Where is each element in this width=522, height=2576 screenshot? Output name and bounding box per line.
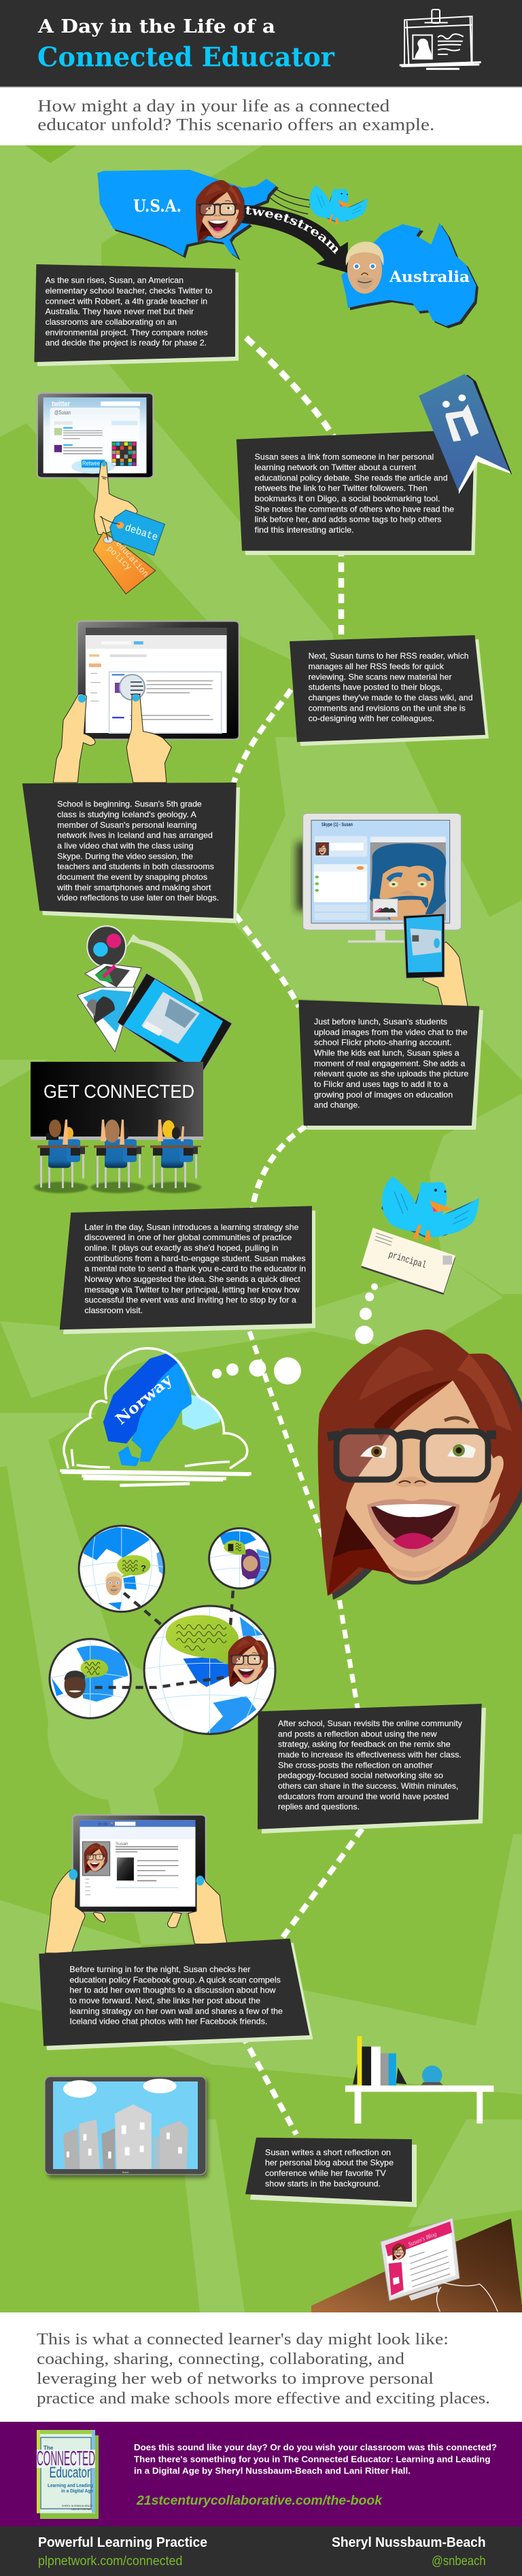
book cover xyxy=(37,2430,99,2519)
panel text xyxy=(84,1223,306,1315)
tablet: Facebook held in two hands xyxy=(46,1815,227,1953)
question mark: ? xyxy=(141,1563,146,1573)
panel text: class is studying Iceland's geology. A xyxy=(57,810,196,819)
intro text: How might a day in your life as a connected xyxy=(37,96,390,115)
publisher credit: plpnetwork.com/connected xyxy=(38,2554,182,2569)
panel text: educators from around the world have posted xyxy=(278,1792,449,1801)
panel text: replies and questions. xyxy=(278,1803,360,1812)
panel text xyxy=(69,1965,283,2026)
panel text: her personal blog about the Skype xyxy=(265,2159,394,2168)
portrait: Susan on globe xyxy=(228,1636,268,1687)
panel text: growing pool of images on education xyxy=(314,1090,453,1099)
book cover: in a Digital Age xyxy=(61,2488,93,2494)
globe: Robert xyxy=(79,1526,164,1612)
panel: after school xyxy=(258,1704,486,1833)
label: tweetstream xyxy=(245,214,339,260)
monitor frame xyxy=(381,2218,459,2301)
tablet body xyxy=(77,621,239,739)
closing statement: practice and make schools more effective and exciting places. xyxy=(37,2389,490,2408)
author credit: @snbeach xyxy=(432,2554,486,2569)
panel text xyxy=(56,800,219,903)
panel text: video reflections to use later on their blogs. xyxy=(57,894,219,903)
monitor stand xyxy=(375,929,385,942)
icon: Susan avatar xyxy=(392,2243,406,2261)
panel text: teachers and students in both classrooms xyxy=(57,863,214,872)
arrow: upload sweep xyxy=(125,934,203,1003)
panel: school is beginning xyxy=(22,783,240,923)
panel text: She notes the comments of others who have read the xyxy=(255,505,454,514)
panel text: connect with Robert, a 4th grade teacher in xyxy=(46,297,207,306)
globe: purple-haired colleague xyxy=(209,1528,271,1588)
panel: later in the day xyxy=(60,1206,315,1334)
icon: flickr dots xyxy=(87,926,126,967)
panel text: made to increase its effectiveness with her class. xyxy=(278,1751,462,1759)
portrait: Robert on globe xyxy=(105,1571,122,1596)
panel text: Next, Susan turns to her RSS reader, which xyxy=(309,652,469,661)
label: Norway: Norway xyxy=(112,1371,176,1429)
desk with blog monitor xyxy=(311,2218,522,2312)
panel: before turning in xyxy=(39,1939,313,2050)
hand: right xyxy=(126,694,171,783)
label: principal: principal xyxy=(387,1249,428,1271)
panel text: member of Susan's personal learning xyxy=(57,821,196,829)
sketch outline xyxy=(60,1348,251,1486)
panel text: link before her, and adds some tags to help others xyxy=(255,516,442,524)
blog screen xyxy=(385,2221,455,2297)
closing statement: coaching, sharing, connecting, collaborating, and xyxy=(37,2350,404,2368)
label: retweet button: Retwee xyxy=(82,460,100,467)
bookmark: Diigo ribbon xyxy=(419,374,512,495)
icon: sketched id badge xyxy=(400,10,481,69)
title line two: Connected Educator xyxy=(37,42,334,73)
tag: education policy xyxy=(93,532,156,594)
book cover: SHERYL NUSSBAUM-BEACH xyxy=(62,2505,92,2507)
panel text: online. It plays out exactly as she'd hoped, pulling in xyxy=(84,1244,278,1253)
bookshelf table with books and globe xyxy=(345,2036,493,2124)
panel text: retweets the link to her Twitter followers. Then xyxy=(255,484,428,493)
dashed path: the day's journey xyxy=(234,338,362,2134)
panel text: learning strategy on her own wall and shares a few of the xyxy=(69,2007,283,2016)
panel text: network lives in Iceland and has arranged xyxy=(57,831,213,840)
panel text: a mental note to send a thank you e-card to the educator in xyxy=(84,1265,306,1274)
closing statement: leveraging her web of networks to improve personal xyxy=(37,2369,434,2388)
book cover: The xyxy=(44,2445,54,2451)
panel text: find this interesting article. xyxy=(255,526,354,535)
land: Norway xyxy=(103,1353,178,1444)
panel text: a live video chat with the class using xyxy=(57,842,193,851)
panel text xyxy=(265,2148,394,2188)
promo text: Then there's something for you in The Connected Educator: Learning and Leading xyxy=(134,2454,491,2464)
panel text: Susan sees a link from someone in her personal xyxy=(255,453,434,462)
book cover: Learning and Leading xyxy=(48,2482,93,2488)
panel text: comments and revisions on the unit she is xyxy=(309,704,466,713)
purple book promotion xyxy=(0,2422,522,2526)
panel text: Before turning in for the night, Susan checks her xyxy=(69,1965,251,1974)
portrait: Susan profile photo xyxy=(84,1843,107,1874)
panel text: successful the event was and inviting her to stop by for a xyxy=(84,1296,296,1305)
panel text: Iceland video chat photos with her Facebook friends. xyxy=(69,2018,267,2026)
icon: skype caller avatar xyxy=(317,842,328,856)
tablet with twitter, tags and finger: policy xyxy=(105,543,134,573)
map: USA xyxy=(97,170,279,260)
panel text: As the sun rises, Susan, an American xyxy=(46,276,184,285)
panel text: After school, Susan revisits the online community xyxy=(278,1719,462,1728)
panel text: message via Twitter to her principal, letting her know how xyxy=(84,1285,300,1294)
hand: pointing finger xyxy=(94,461,137,535)
footer xyxy=(0,2526,522,2576)
panel text: and posts a reflection about using the new xyxy=(278,1730,437,1738)
title line one: A Day in the Life of a xyxy=(37,16,275,37)
panel text: educational policy debate. She reads the article and xyxy=(255,473,448,482)
cable xyxy=(436,2283,498,2312)
label: profile name: Susan xyxy=(116,1842,128,1846)
panel text: elementary school teacher, checks Twitter to xyxy=(46,287,213,296)
label: twitter logo: twitter xyxy=(52,400,71,408)
portrait: colleague with cap xyxy=(65,1670,86,1698)
table top xyxy=(345,2086,493,2092)
chalkboard with students xyxy=(31,1062,203,1193)
globe: Susan xyxy=(144,1605,275,1734)
tablet with twitter, tags and finger: education xyxy=(114,539,151,579)
maps: U.S.A. and Australia linked by tweetstream: tweetstream xyxy=(245,207,338,254)
panel text: strategy, asking for feedback on the remix she xyxy=(278,1740,451,1749)
hand: right xyxy=(188,1876,227,1944)
tablet with twitter, tags and finger xyxy=(37,393,164,594)
panel text: classrooms are collaborating on an xyxy=(46,318,177,327)
portrait: Susan xyxy=(196,180,245,243)
crystal ball xyxy=(422,2066,442,2085)
panel: just before lunch xyxy=(298,1000,483,1130)
icon: bird xyxy=(381,1177,479,1242)
panel text: relevant quote as she uploads the picture xyxy=(314,1070,468,1079)
envelope xyxy=(361,1228,455,1295)
promo text xyxy=(134,2442,497,2476)
panel text: Susan writes a short reflection on xyxy=(265,2148,391,2157)
panel text: discovered in one of her global communities of practice xyxy=(84,1234,292,1242)
panel text: learning network on Twitter about a current xyxy=(255,463,417,472)
panel text: environmental project. They compare notes xyxy=(46,328,208,337)
desktop monitor: skype video call, phone in hand xyxy=(296,813,468,1007)
connectors xyxy=(95,1591,233,1687)
chalk label: GET CONNECTED xyxy=(44,1081,194,1102)
purple book promotion: CONNECTED xyxy=(37,2446,95,2470)
hand: left xyxy=(46,1870,85,1953)
publisher credit xyxy=(38,2535,207,2569)
intro text: educator unfold? This scenario offers an example. xyxy=(37,114,434,135)
book url: 21stcenturycollaborative.com/the-book xyxy=(136,2494,383,2508)
panel: short reflection xyxy=(245,2138,417,2207)
map: Australia xyxy=(341,223,478,328)
panel: twitter link xyxy=(237,429,478,555)
tablet: twitter xyxy=(37,393,153,478)
land: Sweden xyxy=(130,1352,192,1462)
panel text xyxy=(314,1018,468,1110)
panel text: reviewing. She scans new material her xyxy=(309,673,452,681)
speech bubbles xyxy=(80,1540,245,1679)
panel text: While the kids eat lunch, Susan spies a xyxy=(314,1049,459,1058)
tablet with twitter, tags and finger: debate xyxy=(123,522,159,543)
globe: fourth colleague xyxy=(50,1639,130,1718)
panel text: education policy Facebook group. A quick scan compels xyxy=(69,1975,281,1984)
monitor frame xyxy=(303,813,461,930)
tablet body xyxy=(73,1815,206,1912)
panel text: with their smartphones and making short xyxy=(56,883,211,892)
monitor stand xyxy=(408,2286,440,2301)
panel text xyxy=(278,1719,462,1812)
tablet: RSS reader held in two hands xyxy=(53,621,239,783)
portrait: Robert xyxy=(346,242,384,293)
panel: sunrise xyxy=(34,264,239,366)
panel text: and change. xyxy=(314,1101,360,1110)
panel text: She cross-posts the reflection on another xyxy=(278,1761,433,1770)
label: Australia: Australia xyxy=(389,268,470,286)
panel text: Later in the day, Susan introduces a learning strategy she xyxy=(84,1223,298,1232)
panel text: manages all her RSS feeds for quick xyxy=(309,662,444,671)
panel text: bookmarks it on Diigo, a social bookmarking tool. xyxy=(255,495,440,503)
panel text: others can share in the success. Within minutes, xyxy=(278,1782,458,1791)
panel text: pedagogy-focused social networking site so xyxy=(278,1772,444,1781)
flying bird with letter for principal xyxy=(361,1177,479,1295)
hand: left xyxy=(53,694,95,783)
books xyxy=(358,2036,362,2086)
publisher credit: Powerful Learning Practice xyxy=(38,2535,207,2550)
icon: twitter bird xyxy=(309,185,368,225)
intro text xyxy=(37,96,434,135)
panel text xyxy=(46,276,213,348)
panel text: students have posted to their blogs, xyxy=(309,683,442,692)
television with city: Brand xyxy=(122,2171,128,2174)
tablet tilted xyxy=(117,973,232,1077)
student two xyxy=(90,1120,145,1193)
student three xyxy=(147,1120,201,1193)
panel text xyxy=(309,652,473,723)
panel text: to Flickr and uses tags to add it to a xyxy=(314,1080,448,1089)
video call: man with blue hair xyxy=(370,842,446,920)
panel text: changes they've made to the class wiki, and xyxy=(309,694,473,702)
closing statement: This is what a connected learner's day might look like: xyxy=(37,2330,449,2348)
photos xyxy=(77,963,141,1052)
land: Finland xyxy=(181,1395,220,1430)
panel text: Norway who suggested the idea. She sends a quick direct xyxy=(84,1275,301,1284)
closing statement xyxy=(0,2312,522,2422)
panel text xyxy=(255,453,454,535)
panel text: upload images from the video chat to the xyxy=(314,1028,468,1037)
panel text: moment of real engagement. She adds a xyxy=(314,1059,466,1068)
panel text: document the event by snapping photos xyxy=(57,873,207,882)
maps: U.S.A. and Australia linked by tweetstream xyxy=(80,170,478,329)
television with city xyxy=(45,2077,208,2178)
label: skype title: Skype (1) - Susan xyxy=(321,821,353,827)
phone and hand xyxy=(404,914,468,1007)
panel text: show starts in the background. xyxy=(265,2179,381,2188)
panel text: conference while her favorite TV xyxy=(265,2169,386,2178)
panel text: School is beginning. Susan's 5th grade xyxy=(57,800,202,809)
book cover: Educator xyxy=(49,2464,90,2481)
promo text: in a Digital Age by Sheryl Nussbaum-Beach and Lani Ritter Hall. xyxy=(134,2466,411,2476)
panel text: classroom visit. xyxy=(84,1306,143,1315)
thought bubbles xyxy=(212,1283,378,1384)
author credit: Sheryl Nussbaum-Beach xyxy=(332,2535,486,2550)
header bar xyxy=(0,0,522,87)
panel text: her to add her own thoughts to a discussion about how xyxy=(69,1986,276,1995)
panel: RSS reader xyxy=(290,635,489,746)
panel text: Australia. They have never met but their xyxy=(46,308,194,317)
book ends xyxy=(348,2060,407,2084)
large portrait: Susan xyxy=(318,1329,522,1600)
label: handle: @Susan xyxy=(54,410,71,416)
student one xyxy=(34,1120,88,1193)
panel text: Just before lunch, Susan's students xyxy=(314,1018,447,1026)
label: U.S.A.: U.S.A. xyxy=(133,196,181,216)
panel text: Skype. During the video session, the xyxy=(57,852,193,861)
book cover: LANI RITTER HALL xyxy=(71,2508,92,2511)
author credit xyxy=(332,2535,486,2569)
flickr upload: icon, arrow, photos, tablet xyxy=(77,926,232,1077)
panel text: school Flickr photo-sharing account. xyxy=(314,1039,452,1048)
global network of globes xyxy=(50,1526,275,1734)
panel text: contributions from a hard-to-engage student. Susan makes xyxy=(84,1254,306,1263)
panel text: to move forward. Next, she links her post about the xyxy=(69,1997,260,2005)
promo text: Does this sound like your day? Or do you wish your classroom was this connected? xyxy=(134,2442,497,2452)
tag: debate xyxy=(100,510,164,556)
panel text: co-designing with her colleagues. xyxy=(309,715,434,723)
panel text: and decide the project is ready for phase 2. xyxy=(46,339,207,348)
desk xyxy=(311,2219,522,2312)
arrow: tweetstream swoosh xyxy=(241,205,348,273)
label: blog title: Susan's Blog xyxy=(407,2230,438,2248)
strings from map to bird xyxy=(269,188,311,214)
Norway sketched cloud xyxy=(60,1348,251,1486)
